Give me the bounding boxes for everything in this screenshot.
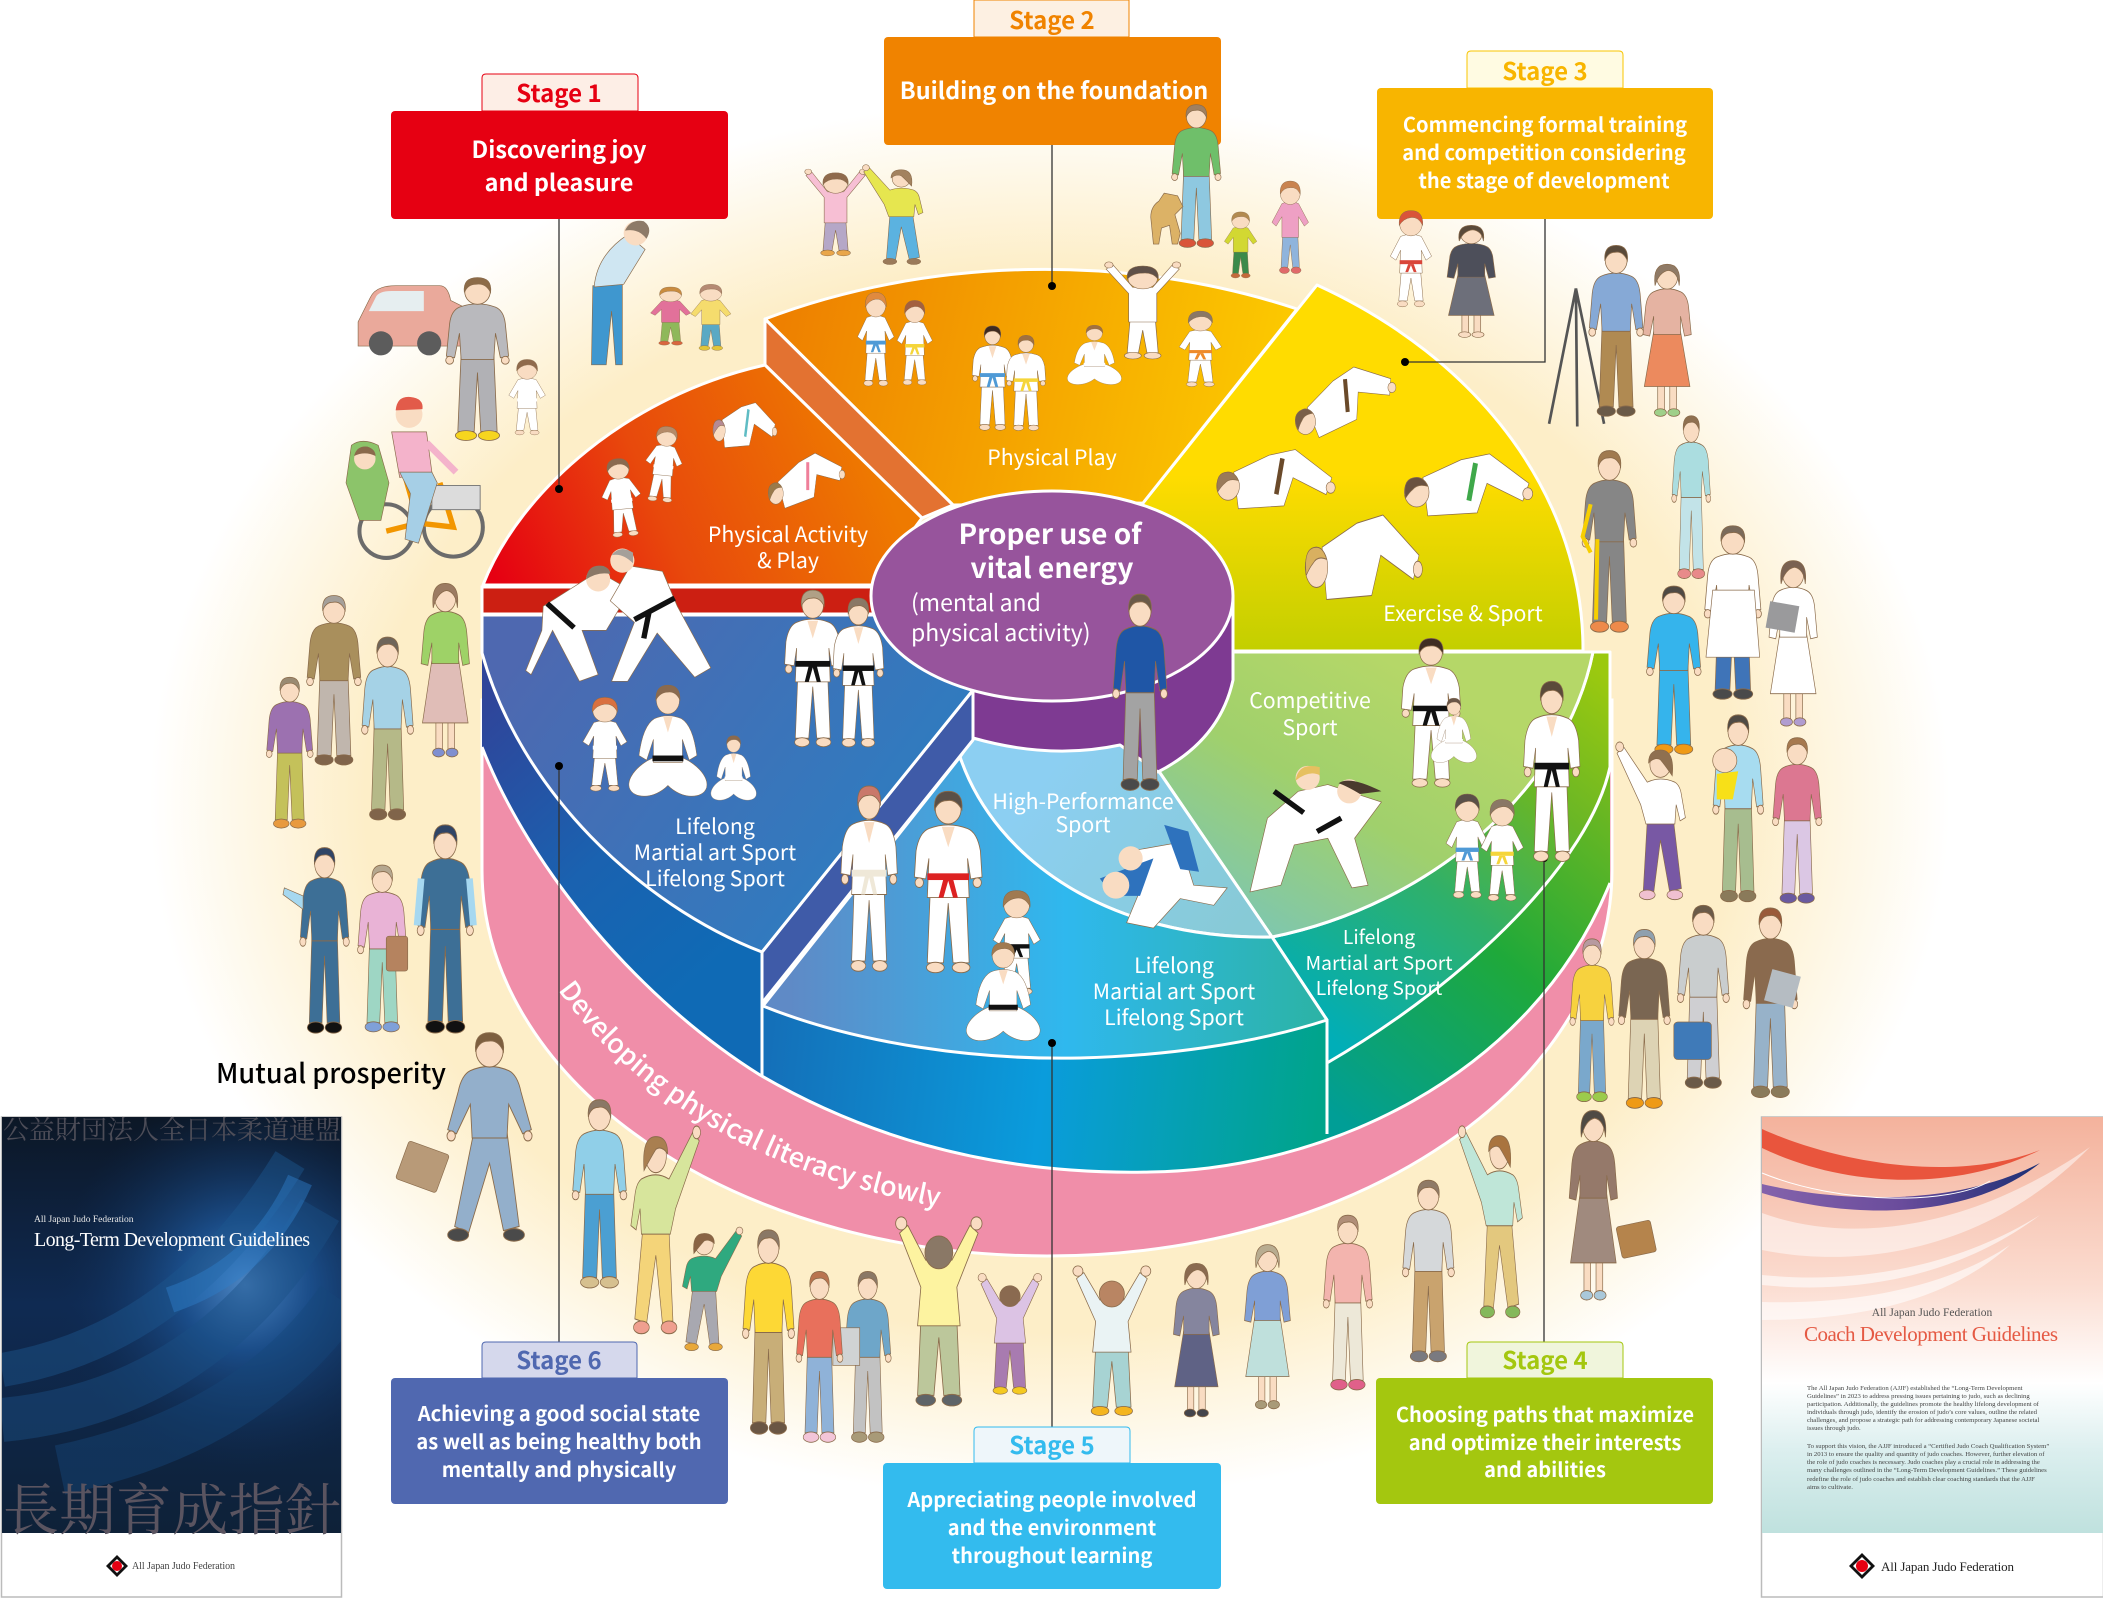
- elderly woman in yellow: [1570, 939, 1614, 1102]
- panel: stage 3: the stage of development: [1418, 165, 1670, 194]
- senior judoka pair: lifelong wedge: [785, 590, 884, 747]
- woman in pink and orange: [1643, 264, 1691, 416]
- kendo child: [1447, 225, 1495, 337]
- cover eyebrow: All Japan Judo Federation: [1872, 1307, 1992, 1319]
- panel: stage 6: Stage 6: [516, 1341, 602, 1376]
- stage leader lines: [555, 145, 1548, 1427]
- cover body text: the role of judo coaches is necessary. Judo coaches play a crucial role in addressing the: [1807, 1459, 2040, 1466]
- man holding toddler: [1713, 715, 1764, 902]
- cover artwork: [1762, 1117, 2103, 1533]
- lifelong wedge, left: [482, 615, 973, 952]
- wedge labels: [634, 441, 1543, 1032]
- development pie diagram: [482, 269, 1612, 1256]
- stage 6 tab: [482, 1342, 637, 1378]
- label: physical play: Physical Play: [987, 441, 1117, 472]
- woman taking a photo: [1323, 1215, 1373, 1390]
- label: lifelong, right: Lifelong: [1343, 922, 1415, 950]
- document held by man: [1764, 969, 1801, 1008]
- label: lifelong, right: Lifelong Sport: [1316, 973, 1442, 1001]
- panel: stage 3: and competition considering: [1402, 137, 1686, 166]
- family judoka group: lifelong wedge: [583, 685, 756, 800]
- centre heading: Proper use of: [958, 513, 1143, 553]
- panel: stage 6: as well as being healthy both: [416, 1426, 702, 1455]
- label: competitive sport: Sport: [1282, 711, 1338, 742]
- female judoka, lifelong bottom wedge: [841, 786, 897, 971]
- orange wall: [765, 319, 953, 518]
- panel: stage 5: throughout learning: [952, 1540, 1152, 1569]
- cover body text: individuals through judo, identify the erosion of judo’s core values, outline the related: [1807, 1409, 2038, 1416]
- label: lifelong, bottom: Lifelong Sport: [1104, 1001, 1244, 1032]
- panel: stage 5: [883, 1426, 1221, 1589]
- panel: stage 1: and pleasure: [485, 164, 633, 198]
- cover body text: To support this vision, the AJJF introduced a “Certified Judo Coach Qualification System”: [1807, 1443, 2049, 1450]
- girl walking: [1272, 181, 1309, 274]
- stage 5 tab: [974, 1427, 1130, 1463]
- clipboard: [1766, 601, 1799, 633]
- label: exercise and sport: Exercise & Sport: [1383, 597, 1543, 628]
- throw: high-performance wedge: [1100, 825, 1227, 928]
- centre ellipse: [871, 491, 1233, 701]
- stage 1 tab: [482, 74, 638, 111]
- doctor long coat: [1706, 590, 1760, 657]
- elderly man in tan sweater: [307, 595, 361, 765]
- stage 3 tab: [1467, 51, 1623, 88]
- girl with raised arms: [978, 1273, 1042, 1394]
- label: high-performance sport: Sport: [1055, 808, 1111, 839]
- cylinder side wall, left blue section: [482, 640, 762, 1080]
- bowing man: [591, 221, 649, 365]
- cover body text: The All Japan Judo Federation (AJJF) established the “Long-Term Development: [1807, 1385, 2023, 1392]
- vertical edges: [762, 952, 1327, 1134]
- stage 3 box: [1377, 88, 1713, 219]
- bowing child two: [691, 284, 731, 350]
- stage 1 box: [391, 111, 728, 219]
- doctor: [1704, 526, 1761, 699]
- judoka: physical play wedge: [858, 262, 1222, 431]
- cover body text: participation. Additionally, the guidelines promote the healthy lifelong development of: [1807, 1401, 2040, 1408]
- stage 2 tab: [974, 0, 1129, 37]
- label: competitive sport: Competitive: [1249, 684, 1371, 715]
- grappling judoka pair: lifelong wedge: [526, 549, 711, 681]
- man in light blue shirt: [362, 637, 414, 820]
- cover body text: many challenges outlined in the “Long-Term Development Guidelines.” These guidelines: [1807, 1467, 2047, 1474]
- physical activity and play wedge: [483, 365, 922, 585]
- panel: stage 2: Stage 2: [1009, 1, 1095, 36]
- judoka: exercise and sport wedge: [1217, 353, 1533, 600]
- panel: stage 3: Stage 3: [1502, 52, 1588, 87]
- label: physical activity and play: & Play: [757, 544, 819, 575]
- cover body text: Guidelines” in 2023 to address pressing issues pertaining to judo, such as declining: [1807, 1393, 2030, 1400]
- businessman with briefcase: [395, 1033, 532, 1241]
- label: lifelong, left: Martial art Sport: [634, 836, 796, 867]
- cover body text: challenges, and propose a strategic path for addressing contemporary Japanese societal: [1807, 1417, 2039, 1424]
- chairman figure at centre: [1113, 594, 1167, 790]
- panel: stage 3: Commencing formal training: [1403, 109, 1687, 138]
- elderly man in vest: [1618, 929, 1670, 1108]
- outer pink ring: developing physical literacy: [482, 700, 1612, 1256]
- judoka: competitive sport wedge: [1250, 638, 1580, 901]
- panel: stage 5: Appreciating people involved: [906, 1484, 1197, 1513]
- stage 6 box: [391, 1378, 728, 1504]
- man in grey jacket with bag: [1674, 905, 1729, 1088]
- physical play wedge: [765, 269, 1297, 505]
- exercise and sport wedge: [1100, 285, 1583, 651]
- child with raised arms: [1073, 1266, 1151, 1416]
- cylinder side wall, centre blue-to-teal section: [764, 1008, 1327, 1171]
- lifelong sport ring, right: [1272, 652, 1610, 1063]
- elderly woman in blue: [1244, 1245, 1290, 1409]
- businesswoman with bag: [1569, 1111, 1657, 1300]
- cover body text: aims to cultivate.: [1807, 1484, 1853, 1491]
- man in grey sweater: [1402, 1180, 1454, 1362]
- stage 5 box: [883, 1463, 1221, 1589]
- child in green: [682, 1227, 743, 1351]
- male judoka with red belt: [914, 791, 982, 973]
- panel: stage 5: Stage 5: [1009, 1426, 1095, 1461]
- stage 4 box: [1376, 1378, 1713, 1504]
- illustrated people: [266, 105, 1822, 1442]
- tablet: [833, 1328, 860, 1365]
- man with camera: [1589, 245, 1643, 416]
- judo child with red helmet: [1390, 211, 1432, 307]
- panel: stage 6: [391, 1341, 728, 1504]
- heading: mutual prosperity: Mutual prosperity: [216, 1052, 446, 1091]
- woman in pink jacket: [1772, 738, 1822, 903]
- man in blue tracksuit: [1646, 586, 1701, 754]
- side wall between blue wedges: [762, 690, 973, 1003]
- label: lifelong, bottom: Lifelong: [1134, 949, 1214, 980]
- woman on bicycle with child seat: [346, 397, 483, 558]
- woman in scrubs: [1672, 416, 1711, 579]
- panel: long-term development guidelines booklet: [2, 1116, 342, 1597]
- panel: stage 1: Discovering joy: [472, 131, 647, 165]
- tripod: [1549, 288, 1604, 427]
- centre heading: vital energy: [971, 547, 1133, 587]
- centre subheading: (mental and: [911, 584, 1041, 618]
- japanese cover title: 長期育成指針: [3, 1481, 341, 1543]
- cover body text: issues through judo.: [1807, 1425, 1861, 1432]
- man in tracksuit: [1582, 451, 1637, 632]
- panel: stage 2: [884, 0, 1221, 145]
- curved label: developing physical literacy slowly: Developing physical literacy slowly: [560, 980, 941, 1211]
- girl in red sweater: [796, 1271, 843, 1442]
- label: lifelong, left: Lifelong Sport: [645, 862, 785, 893]
- label: high-performance sport: High-Performance: [992, 785, 1174, 816]
- stage 2 box: [884, 37, 1221, 145]
- panel: stage 6: Achieving a good social state: [417, 1398, 700, 1427]
- footer text: All Japan Judo Federation: [132, 1561, 235, 1572]
- man in checked shirt: [572, 1100, 627, 1288]
- panel: stage 4: and abilities: [1484, 1454, 1606, 1483]
- man in yellow hoodie, arms raised: [896, 1217, 982, 1406]
- child with bag: [1224, 212, 1257, 278]
- panel: stage 2: Building on the foundation: [900, 72, 1208, 106]
- label: lifelong, right: Martial art Sport: [1305, 948, 1453, 976]
- cover title: Coach Development Guidelines: [1804, 1322, 2058, 1346]
- woman walking dog: [1172, 105, 1221, 247]
- stage 4 tab: [1467, 1342, 1623, 1378]
- label: lifelong, bottom: Martial art Sport: [1093, 975, 1255, 1006]
- police officer: [417, 825, 473, 1033]
- cover body text: in 2013 to ensure the quality and quantity of judo coaches. However, further elevation of: [1807, 1451, 2045, 1458]
- panel: stage 1: Stage 1: [516, 74, 602, 109]
- dog: [1151, 193, 1183, 244]
- woman in white coat: [1769, 561, 1817, 726]
- judoka: physical activity and play wedge: [598, 403, 847, 538]
- panel: stage 4: Stage 4: [1502, 1341, 1588, 1376]
- white edge of the cylinder base: [482, 747, 1610, 1172]
- man in yellow sweater: [742, 1230, 795, 1434]
- man with arm raised, mint sweater: [1458, 1126, 1522, 1318]
- competitive sport wedge: [1100, 652, 1593, 937]
- panel: stage 1: [391, 74, 728, 219]
- judoka pair on floor: [966, 891, 1040, 1041]
- panel: stage 3: [1377, 51, 1713, 219]
- high-performance sport wedge: [960, 650, 1272, 937]
- elderly woman with bag: [358, 865, 408, 1032]
- red band side: [482, 587, 877, 614]
- panel: stage 5: and the environment: [948, 1512, 1157, 1541]
- label: physical activity and play: Physical Activity: [708, 518, 868, 549]
- jumping girl: [805, 169, 866, 256]
- police officer pointing: [283, 848, 349, 1033]
- jumping boy in yellow: [863, 165, 923, 265]
- federation logo: [1849, 1553, 1875, 1579]
- bowing children: [651, 287, 691, 345]
- centre cylinder side: [973, 596, 1233, 772]
- cover eyebrow: All Japan Judo Federation: [34, 1215, 134, 1225]
- woman in striped top: [631, 1126, 701, 1334]
- woman with skirt: [421, 583, 469, 757]
- car: [358, 286, 467, 355]
- cover artwork: [2, 1117, 341, 1533]
- man in brown jacket: [1743, 908, 1798, 1097]
- federation logo: [106, 1555, 128, 1577]
- centre subheading: physical activity): [911, 614, 1091, 648]
- panel: stage 4: Choosing paths that maximize: [1396, 1399, 1694, 1428]
- child judoka with father: [509, 359, 545, 435]
- man in hoodie: [446, 278, 509, 440]
- panel: stage 4: [1376, 1341, 1713, 1504]
- footer text: All Japan Judo Federation: [1881, 1559, 2014, 1574]
- japanese federation name on the cover: 公益財団法人全日本柔道連盟: [3, 1116, 341, 1145]
- boy in blue jacket: [844, 1271, 891, 1442]
- man with raised arm, purple trousers: [1616, 742, 1685, 900]
- panel: stage 6: mentally and physically: [442, 1454, 677, 1483]
- label: lifelong, left: Lifelong: [675, 810, 755, 841]
- schoolgirl: [1173, 1263, 1219, 1417]
- elderly woman in purple: [266, 677, 313, 828]
- panel: coach development guidelines booklet: [1762, 1117, 2103, 1597]
- lifelong wedge, bottom: [763, 757, 1327, 1058]
- cylinder side wall, right green section: [1327, 774, 1610, 1138]
- cover body text: redefine the role of judo coaches and establish clear coaching standards that the AJJF: [1807, 1476, 2035, 1483]
- panel: stage 4: and optimize their interests: [1409, 1427, 1681, 1456]
- cover title: Long-Term Development Guidelines: [34, 1229, 310, 1251]
